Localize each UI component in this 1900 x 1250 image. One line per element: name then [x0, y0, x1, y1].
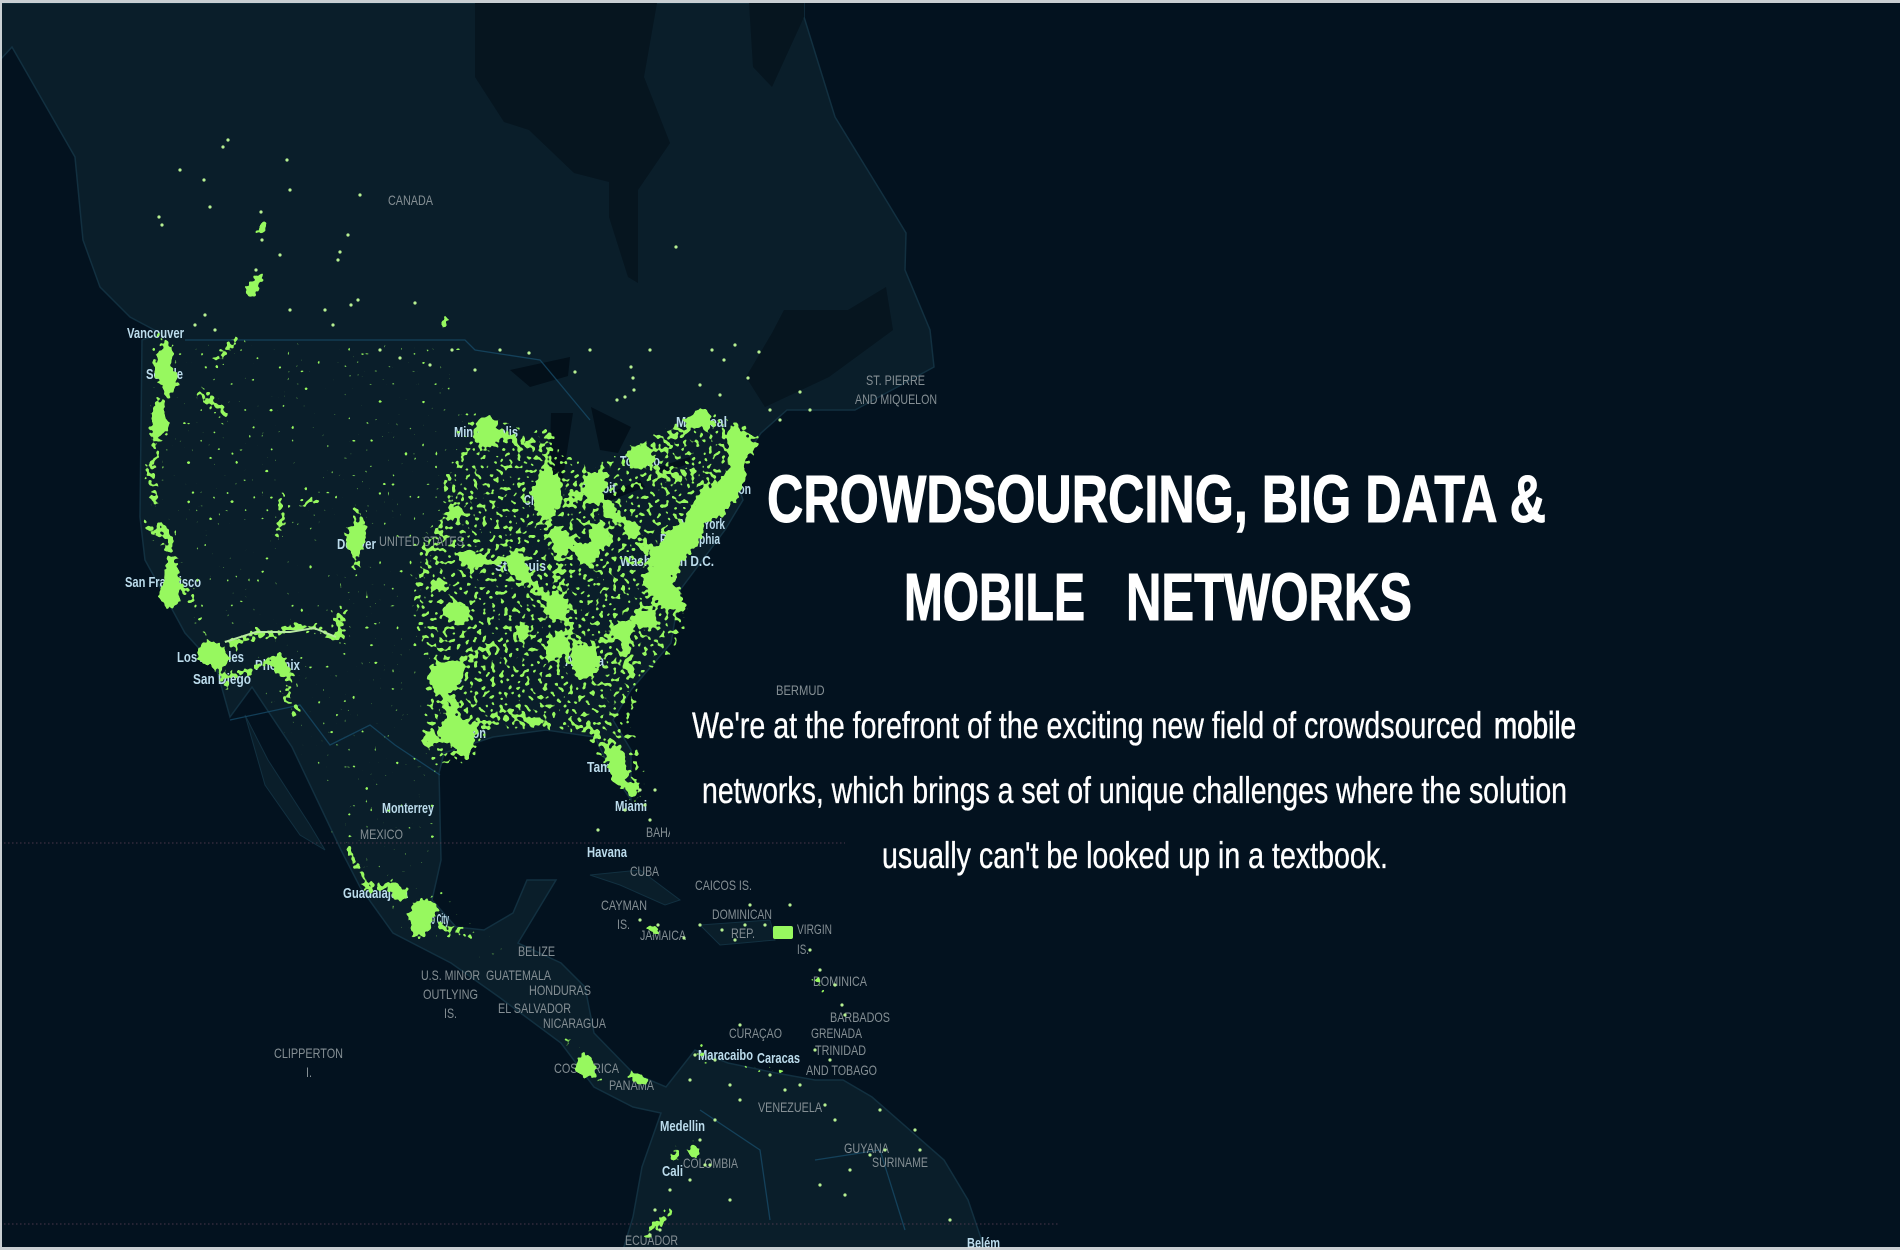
country and territory labels: CANADA [388, 192, 433, 208]
map: dotted latitude lines [0, 843, 1060, 1224]
city labels: Vancouver [127, 326, 184, 342]
density: western US and Mexico sparse base [145, 340, 520, 965]
body paragraph: mobile [1494, 705, 1576, 746]
city labels: Miami [615, 799, 647, 815]
city labels: Tampa [587, 760, 626, 776]
city labels: Seattle [146, 367, 183, 383]
map: baja peninsula [245, 715, 325, 850]
country and territory labels: MEXICO [360, 826, 403, 842]
city labels: San Francisco [125, 575, 201, 591]
country and territory labels: GUATEMALA [486, 967, 552, 983]
map: land masses [0, 3, 1060, 1250]
city labels: Minneapolis [454, 425, 518, 441]
country and territory labels: COLOMBIA [683, 1155, 738, 1171]
coverage: Puerto Rico block [773, 926, 793, 939]
coverage: scattered dots across Canada and Latin America [159, 140, 950, 1235]
body paragraph: networks, which brings a set of unique challenges where the solution [702, 770, 1567, 811]
city labels: Dallas [430, 671, 462, 687]
city labels: Medellin [660, 1119, 705, 1135]
network coverage: density map rendered as speckled data points [145, 220, 830, 1240]
title [767, 462, 1546, 635]
country and territory labels: CUBA [630, 863, 659, 879]
country and territory labels: COSTA RICA [554, 1060, 620, 1076]
city labels: Washington D.C. [620, 554, 714, 570]
country and territory labels: BELIZE [518, 943, 555, 959]
city labels: San Diego [193, 672, 251, 688]
map: hudson bay [475, 3, 670, 283]
body paragraph: usually can't be looked up in a textbook. [882, 835, 1388, 876]
country and territory labels: JAMAICA [640, 927, 686, 943]
city labels: Phoenix [255, 658, 300, 674]
country and territory labels: CLIPPERTON [274, 1045, 343, 1061]
map: country borders [185, 340, 905, 1230]
city labels: Toronto [620, 454, 660, 470]
country and territory labels [274, 192, 937, 1248]
country and territory labels: VENEZUELA [758, 1099, 823, 1115]
country and territory labels: NICARAGUA [543, 1015, 607, 1031]
country and territory labels: BAHAMAS [646, 824, 698, 840]
city labels: Montreal [676, 415, 727, 431]
body paragraph [692, 705, 1576, 876]
city labels: Denver [337, 537, 376, 553]
density: corridors and metro regions [145, 330, 830, 1240]
density: city hot spots [154, 220, 743, 1162]
map: gulf of st lawrence [746, 287, 893, 407]
city labels [125, 326, 1000, 1250]
city labels: Chicago [524, 493, 562, 509]
country and territory labels: IS. [617, 916, 630, 932]
city labels: Los Angeles [177, 650, 244, 666]
city labels: Havana [587, 845, 628, 861]
country and territory labels: ECUADOR [625, 1232, 678, 1248]
country and territory labels: DOMINICAN [712, 906, 772, 922]
country and territory labels: CURAÇAO [729, 1025, 782, 1041]
map: arctic inlet [749, 3, 804, 87]
country and territory labels: DOMINICA [813, 973, 868, 989]
body paragraph: We're at the forefront of the exciting new field of crowdsourced [692, 705, 1482, 746]
country and territory labels: VIRGIN [797, 921, 832, 937]
country and territory labels: I. [306, 1064, 312, 1080]
city labels: Atlanta [565, 654, 605, 670]
map: great lakes [510, 357, 690, 503]
country and territory labels: UNITED STATES [379, 533, 464, 549]
country and territory labels: REP. [731, 925, 755, 941]
map: caribbean islands [590, 870, 775, 945]
country and territory labels: BERMUDA [776, 682, 833, 698]
country and territory labels: HONDURAS [529, 982, 591, 998]
city labels: Monterrey [382, 801, 434, 817]
city labels: Mexico City [413, 912, 449, 928]
city labels: Cali [662, 1164, 683, 1180]
city labels: Philadelphia [660, 532, 721, 548]
country and territory labels: TRINIDAD [815, 1042, 866, 1058]
city labels: Guadalajara [343, 886, 409, 902]
country and territory labels: CAICOS IS. [695, 877, 752, 893]
density: eastern US base [410, 405, 760, 805]
city labels: Maracaibo [698, 1048, 753, 1064]
country and territory labels: PANAMA [609, 1077, 655, 1093]
country and territory labels: OUTLYING [423, 986, 478, 1002]
city labels: Boston [715, 482, 751, 498]
country and territory labels: IS. [797, 941, 809, 957]
country and territory labels: AND MIQUELON [855, 391, 937, 407]
city labels: Houston [441, 726, 486, 742]
country and territory labels: CAYMAN [601, 897, 647, 913]
title: MOBILE [904, 560, 1085, 635]
country and territory labels: IS. [444, 1005, 457, 1021]
country and territory labels: BARBADOS [830, 1009, 890, 1025]
country and territory labels: GUYANA [844, 1140, 890, 1156]
title: NETWORKS [1126, 560, 1412, 635]
coverage: thin highway line across the southwest [225, 628, 336, 642]
country and territory labels: ST. PIERRE [866, 372, 925, 388]
country and territory labels: AND TOBAGO [806, 1062, 877, 1078]
title: CROWDSOURCING, BIG DATA & [767, 462, 1546, 537]
city labels: Caracas [757, 1051, 800, 1067]
country and territory labels: U.S. MINOR [421, 967, 480, 983]
country and territory labels: SURINAME [872, 1154, 928, 1170]
city labels: New York [680, 517, 726, 533]
country and territory labels: GRENADA [811, 1025, 862, 1041]
city labels: St. Louis [495, 559, 546, 575]
city labels: Detroit [580, 481, 616, 497]
country and territory labels: EL SALVADOR [498, 1000, 571, 1016]
